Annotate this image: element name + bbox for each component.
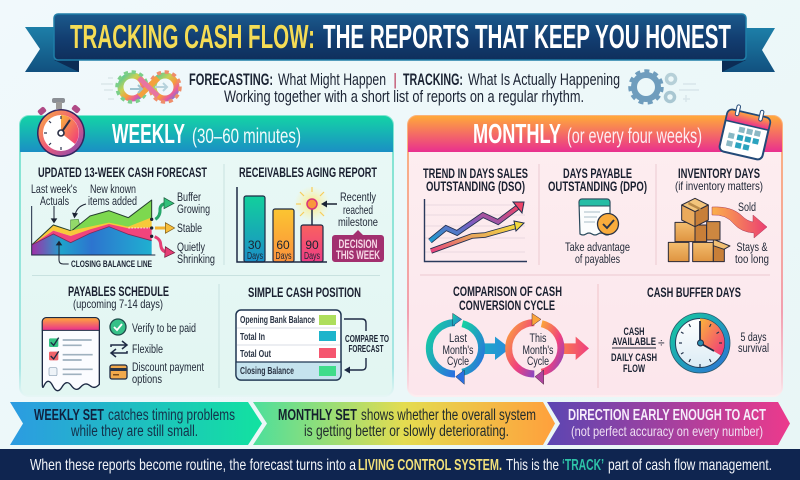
decision this week badge: DECISION <box>338 239 378 251</box>
forecast heading: UPDATED 13-WEEK CASH FORECAST <box>38 165 208 180</box>
cycle label: this month: Cycle <box>527 354 549 368</box>
payables heading: PAYABLES SCHEDULE <box>68 284 169 299</box>
buffer formula: CASH <box>624 326 645 338</box>
subtitle <box>189 71 620 106</box>
DPO heading: OUTSTANDING (DPO) <box>548 179 647 194</box>
icon: calendar <box>719 103 773 160</box>
DPO caption: of payables <box>575 252 620 266</box>
cycle label: this month: Month's <box>522 343 554 357</box>
payables schedule section <box>42 284 204 391</box>
arrow: weekly set: WEEKLY SET <box>34 407 104 424</box>
outcome labels: Buffer <box>177 190 201 204</box>
footer bar: ‘TRACK’ <box>562 457 604 474</box>
cash conversion cycle section <box>429 284 589 384</box>
compare to forecast label: COMPARE TO <box>345 334 389 345</box>
weekly heading: (30–60 minutes) <box>192 125 301 148</box>
title text: TRACKING CASH FLOW: <box>70 18 315 55</box>
annotation: new known items: New known <box>90 182 136 196</box>
footer bar: LIVING CONTROL SYSTEM. <box>358 457 502 474</box>
icon: buffer clock <box>670 313 730 373</box>
outcome labels: Stable <box>177 221 202 235</box>
annotation: closing balance line: CLOSING BALANCE LINE <box>71 259 152 270</box>
icon: invoice with check <box>579 199 618 235</box>
payables list text: Discount payment <box>132 360 204 374</box>
annotation: last week's actuals: Actuals <box>40 194 69 208</box>
survival label: 5 days <box>740 330 766 344</box>
outcome labels: Growing <box>177 202 210 216</box>
aging bar chart: Days <box>276 250 292 262</box>
receivables aging section <box>237 165 384 262</box>
aging bar chart: Days <box>304 250 320 262</box>
DPO caption: Take advantage <box>565 240 630 254</box>
inventory labels: Sold <box>738 200 756 214</box>
footer bar: When these reports become routine, the forecast turns into a <box>30 457 356 474</box>
cash position table: Opening Bank Balance <box>240 314 315 326</box>
receivables heading: RECEIVABLES AGING REPORT <box>239 165 378 180</box>
subtitle: What Might Happen <box>278 71 386 89</box>
payables heading: (upcoming 7-14 days) <box>73 297 163 311</box>
inventory labels: Stays & <box>736 240 768 254</box>
arrow: monthly set <box>253 402 555 445</box>
DPO heading: DAYS PAYABLE <box>563 166 632 181</box>
arrow: monthly set: MONTHLY SET <box>278 407 357 424</box>
panel: weekly <box>20 98 393 396</box>
cycle label: last month: Month's <box>442 343 474 357</box>
cash position heading: SIMPLE CASH POSITION <box>248 285 361 300</box>
title banner <box>25 14 775 72</box>
aging bar chart: 60 <box>276 238 290 252</box>
aging bar chart <box>237 187 327 262</box>
payables list text: Verify to be paid <box>132 321 196 335</box>
payables list text: options <box>132 372 162 386</box>
DSO section <box>423 166 528 262</box>
13-week forecast section <box>31 165 215 270</box>
aging bar chart: Days <box>247 250 263 262</box>
cycle diagram: this month <box>509 313 589 384</box>
icon: swap arrows <box>111 341 127 357</box>
arrow: weekly set: catches timing problems <box>108 407 235 424</box>
cycle diagram: last month <box>429 313 510 384</box>
buffer formula: FLOW <box>623 363 645 375</box>
buffer formula <box>611 326 665 375</box>
compare bracket arrow <box>344 319 366 374</box>
survival label: survival <box>738 341 769 355</box>
simple cash position section <box>236 285 389 380</box>
subtitle: FORECASTING: <box>189 71 273 89</box>
cycle heading: CONVERSION CYCLE <box>459 298 555 313</box>
forecast area chart <box>32 198 175 264</box>
compare to forecast label: FORECAST <box>348 344 384 355</box>
arrow: weekly set <box>10 402 262 445</box>
weekly heading: WEEKLY <box>112 118 185 149</box>
DSO heading: OUTSTANDING (DSO) <box>426 179 525 194</box>
payables list text: Flexible <box>132 342 163 356</box>
icon: verified <box>110 319 126 335</box>
arrow: weekly set: while they are still small. <box>70 423 198 440</box>
inventory heading: (if inventory matters) <box>675 179 763 193</box>
cycle label: last month: Last <box>449 331 467 345</box>
buffer heading: CASH BUFFER DAYS <box>647 285 741 300</box>
icon: payment card <box>110 365 127 379</box>
footer bar: This is the <box>506 457 559 474</box>
icon: stopwatch <box>37 98 85 157</box>
cash position table: Closing Balance <box>240 365 294 377</box>
subtitle: Working together with a short list of reports on a regular rhythm. <box>224 88 584 106</box>
cycle label: this month: This <box>530 331 546 345</box>
sold arrow <box>712 207 767 238</box>
buffer formula: AVAILABLE <box>612 336 656 348</box>
icon: grey gears <box>630 71 699 103</box>
outcome labels: Shrinking <box>177 252 215 266</box>
milestone label: milestone <box>338 215 378 229</box>
subtitle: TRACKING: <box>403 71 463 89</box>
inventory heading: INVENTORY DAYS <box>678 166 760 181</box>
cycle heading: COMPARISON OF CASH <box>453 284 562 299</box>
arrow: direction early enough <box>547 402 790 445</box>
cycle label: last month: Cycle <box>447 354 469 368</box>
weekly header band <box>20 116 393 152</box>
annotation: new known items: items added <box>88 194 137 208</box>
aging bar chart: 90 <box>305 238 319 252</box>
cash position table <box>236 310 341 380</box>
outcome labels: Quietly <box>177 240 206 254</box>
buffer formula: ÷ <box>658 336 665 350</box>
milestone label: Recently <box>340 190 377 204</box>
subtitle: What Is Actually Happening <box>468 71 620 89</box>
DSO heading: TREND IN DAYS SALES <box>423 166 528 181</box>
panel: monthly <box>408 103 782 396</box>
milestone label: reached <box>343 203 373 217</box>
subtitle: | <box>393 71 397 89</box>
aging bar chart: 30 <box>248 238 261 252</box>
icon: infinity gears <box>101 72 180 102</box>
buffer formula: DAILY CASH <box>611 352 657 364</box>
monthly header band <box>408 116 782 152</box>
inventory section <box>668 166 769 266</box>
footer bar <box>0 449 800 480</box>
cash position table: Total In <box>240 331 265 343</box>
icon: receipt checklist <box>42 318 99 391</box>
decision this week badge: THIS WEEK <box>336 250 380 262</box>
milestone marker <box>294 186 337 225</box>
inventory labels: too long <box>735 252 769 266</box>
DSO trend chart <box>424 199 527 262</box>
annotation: last week's actuals: Last week's <box>31 182 77 196</box>
DPO section <box>548 166 647 266</box>
arrow: monthly set: is getting better or slowly deteriorating. <box>304 423 509 440</box>
monthly heading: MONTHLY <box>473 118 561 149</box>
cash buffer days section <box>611 285 769 375</box>
decision this week badge <box>332 230 384 262</box>
icon: stacked boxes <box>668 198 730 262</box>
arrow: monthly set: shows whether the overall system <box>361 407 536 424</box>
monthly heading: (or every four weeks) <box>567 125 702 148</box>
cash position table: Total Out <box>240 348 271 360</box>
